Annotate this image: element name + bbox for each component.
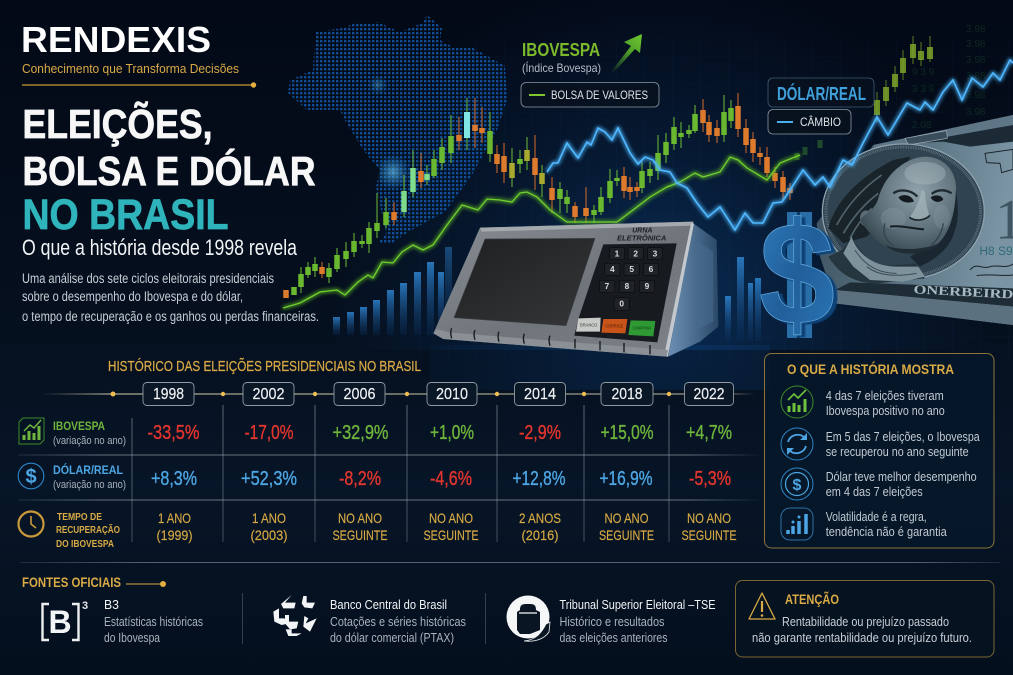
urn label: ELETRÔNICA — [617, 234, 666, 243]
row values: recovery time: (2003) — [250, 527, 288, 543]
insight 4: Volatilidade é a regra, — [826, 510, 927, 524]
row values: recovery time: SEGUINTE — [424, 527, 478, 543]
source: TSE: das eleições anteriores — [560, 631, 668, 645]
keypad: 0 — [619, 299, 624, 309]
market ticker numbers: 3.98 — [966, 24, 986, 35]
source: Banco Central — [273, 595, 466, 645]
panel: o que a história mostra — [764, 354, 994, 548]
B3 logo: 3 — [82, 600, 88, 612]
keypad: CORRIGE — [605, 323, 623, 328]
market ticker numbers: 3.88 — [966, 71, 986, 82]
legend: Dolar/Real: CÂMBIO — [800, 114, 841, 129]
row label: recovery time: RECUPERAÇÃO — [56, 523, 120, 536]
row values: Dolar/Real: +12,8% — [512, 468, 566, 490]
keypad: BRANCO — [580, 323, 598, 328]
row label: Dolar/Real: (variação no ano) — [53, 479, 126, 491]
keypad: CONFIRMA — [632, 325, 652, 330]
arrow up — [610, 34, 642, 73]
Banco Central logo — [273, 595, 317, 636]
intro text: Uma análise dos sete ciclos eleitorais presidenciais — [22, 271, 274, 286]
hero illustration — [280, 0, 1013, 390]
urn label — [617, 228, 666, 243]
insight 3: em 4 das 7 eleições — [826, 485, 923, 499]
insight 4 — [781, 508, 947, 540]
legend: Ibovespa: (Índice Bovespa) — [522, 60, 601, 75]
bill lettering: H8 S9 — [979, 244, 1013, 258]
row values: recovery time — [156, 510, 736, 543]
brand block: RENDEXIS — [21, 19, 211, 60]
row values: Dolar/Real: -5,3% — [689, 468, 731, 490]
intro text: o tempo de recuperação e os ganhos ou perdas financeiras. — [22, 309, 319, 324]
source: TSE: Histórico e resultados — [560, 615, 664, 629]
year boxes: 2010 — [436, 386, 468, 403]
market ticker numbers: 3.98 — [966, 39, 986, 50]
market ticker numbers: 3.98 — [966, 55, 986, 66]
row values: Dolar/Real: +16,9% — [600, 468, 653, 490]
row values: Ibovespa — [148, 422, 732, 444]
intro text: sobre o desempenho do Ibovespa e do dólar, — [22, 289, 243, 304]
brand block — [21, 19, 256, 88]
B3 logo: B — [48, 604, 72, 640]
insight 1: Ibovespa positivo no ano — [826, 404, 945, 418]
row values: Dolar/Real: +52,3% — [241, 468, 297, 490]
row values: Dolar/Real: +8,3% — [151, 468, 197, 490]
insight 2: Em 5 das 7 eleições, o Ibovespa — [826, 430, 980, 444]
table heading: HISTÓRICO DAS ELEIÇÕES PRESIDENCIAIS NO BRASIL — [108, 358, 421, 375]
attention box — [736, 580, 994, 657]
keypad — [574, 243, 677, 342]
subtitle: O que a história desde 1998 revela — [22, 235, 298, 260]
market ticker numbers: 3.98 — [966, 90, 986, 101]
urn label: URNA — [632, 228, 652, 235]
row values: recovery time: NO ANO — [429, 510, 473, 526]
insight 1 — [781, 386, 945, 418]
row values: Ibovespa: +4,7% — [686, 422, 732, 444]
attention box: não garante rentabilidade ou prejuízo futuro. — [752, 631, 972, 645]
year boxes: 2014 — [524, 386, 556, 403]
year boxes: 2018 — [612, 386, 643, 403]
source: B3 — [42, 598, 203, 645]
icon: warning — [749, 593, 775, 619]
row label: Ibovespa: IBOVESPA — [53, 419, 105, 433]
bill lettering — [835, 149, 1013, 325]
row values: recovery time: NO ANO — [604, 510, 649, 526]
screen — [454, 238, 595, 326]
row values: recovery time: (2016) — [522, 527, 558, 543]
main title: ELEIÇÕES, — [22, 101, 212, 147]
legend: Ibovespa — [521, 39, 659, 107]
row label: Ibovespa: (variação no ano) — [53, 435, 126, 447]
history table — [18, 382, 760, 550]
attention box: ATENÇÃO — [785, 592, 839, 607]
row values: Ibovespa: -33,5% — [148, 422, 200, 444]
panel title: O QUE A HISTÓRIA MOSTRA — [787, 362, 954, 377]
row values: Ibovespa: +15,0% — [600, 422, 654, 444]
row values: recovery time: SEGUINTE — [332, 527, 388, 543]
brand block: Conhecimento que Transforma Decisões — [22, 61, 239, 76]
dollar sign: $ — [759, 192, 835, 355]
row values: Ibovespa: +32,9% — [332, 422, 389, 444]
row values: Ibovespa: -17,0% — [244, 422, 294, 444]
intro text — [22, 271, 319, 324]
row values: recovery time: NO ANO — [338, 510, 382, 526]
row values: Dolar/Real: -4,6% — [430, 468, 472, 490]
insight 2 — [781, 428, 980, 460]
keypad: 8 — [625, 281, 630, 291]
keypad: 9 — [645, 281, 650, 291]
keypad: 2 — [633, 248, 638, 258]
row values: recovery time: SEGUINTE — [682, 527, 736, 543]
row label: Dolar/Real: DÓLAR/REAL — [53, 462, 123, 477]
bill lettering: ONERBEIRD — [913, 282, 1013, 302]
electronic voting machine — [433, 222, 718, 357]
market ticker numbers — [912, 24, 986, 131]
source: Banco Central: Cotações e séries históricas — [330, 615, 466, 629]
legend: Ibovespa: IBOVESPA — [522, 39, 600, 60]
icon: dollar circle: $ — [25, 466, 37, 488]
insight 2: se recuperou no ano seguinte — [826, 445, 969, 459]
attention box: Rentabilidade ou prejuízo passado — [782, 615, 949, 629]
source: B3: Estatísticas históricas — [104, 615, 203, 629]
icon: clock — [18, 512, 44, 536]
sources heading: FONTES OFICIAIS — [22, 575, 121, 590]
year boxes — [143, 382, 734, 406]
candlestick chart — [286, 36, 930, 298]
row values: recovery time: NO ANO — [687, 510, 731, 526]
main title: BOLSA E DÓLAR — [22, 148, 316, 194]
market ticker numbers: 3 3 9 — [912, 84, 935, 95]
row label: recovery time: DO IBOVESPA — [56, 538, 114, 550]
legend: Ibovespa: BOLSA DE VALORES — [551, 88, 648, 102]
year boxes: 2006 — [344, 386, 376, 403]
keypad: 6 — [649, 264, 654, 274]
insight 3 — [781, 468, 977, 500]
keypad: 7 — [605, 281, 610, 291]
icon: dollar circle — [18, 463, 44, 489]
main title: NO BRASIL — [22, 191, 228, 239]
row values: Dolar/Real — [151, 468, 731, 490]
row label: recovery time: TEMPO DE — [57, 511, 102, 523]
row label: recovery time — [56, 511, 120, 550]
row values: recovery time: 1 ANO — [252, 510, 286, 526]
year boxes: 2002 — [252, 386, 285, 403]
source: TSE: Tribunal Superior Eleitoral –TSE — [560, 598, 716, 612]
market ticker numbers: 3.98 — [966, 107, 986, 118]
main title — [22, 101, 316, 239]
blue dollar line — [547, 60, 1013, 230]
source: Banco Central: do dólar comercial (PTAX) — [330, 631, 454, 645]
insight 4: tendência não é garantia — [826, 525, 947, 539]
row label: Dolar/Real — [53, 462, 126, 491]
row values: recovery time: 1 ANO — [158, 510, 191, 526]
row values: Ibovespa: +1,0% — [430, 422, 474, 444]
row values: recovery time: 2 ANOS — [519, 510, 561, 526]
legend: Dolar/Real: DÓLAR/REAL — [777, 83, 866, 104]
row values: recovery time: (1999) — [156, 527, 192, 543]
icon: Ibovespa chart — [19, 418, 44, 444]
Franklin portrait — [828, 157, 958, 283]
insight 3: Dólar teve melhor desempenho — [826, 470, 977, 484]
dotted map of Brazil — [288, 16, 506, 242]
keypad: 1 — [615, 248, 620, 258]
year boxes: 1998 — [153, 386, 184, 403]
insight 3: $ — [793, 477, 802, 494]
source: Banco Central: Banco Central do Brasil — [330, 598, 447, 612]
dollar bill with portrait — [817, 115, 1013, 325]
green Ibovespa line — [283, 155, 800, 308]
market ticker numbers: 9 3 9 — [912, 67, 935, 78]
year boxes: 2022 — [694, 386, 725, 403]
row values: Dolar/Real: -8,2% — [339, 468, 381, 490]
blue background bars — [333, 247, 761, 341]
B3 logo — [42, 600, 88, 640]
source: TSE — [506, 596, 716, 645]
keypad: 3 — [653, 248, 658, 258]
keypad: 5 — [629, 264, 634, 274]
keypad: 4 — [610, 264, 615, 274]
market ticker numbers: 2.08 — [912, 120, 932, 131]
TSE logo — [506, 596, 550, 641]
row values: recovery time: SEGUINTE — [599, 527, 654, 543]
row label: Ibovespa — [53, 419, 126, 447]
source: B3: B3 — [104, 598, 119, 612]
legend: Dolar/Real — [768, 78, 874, 134]
source: B3: do Ibovespa — [104, 631, 160, 645]
row values: Ibovespa: -2,9% — [519, 422, 561, 444]
insight 1: 4 das 7 eleições tiveram — [826, 389, 944, 403]
